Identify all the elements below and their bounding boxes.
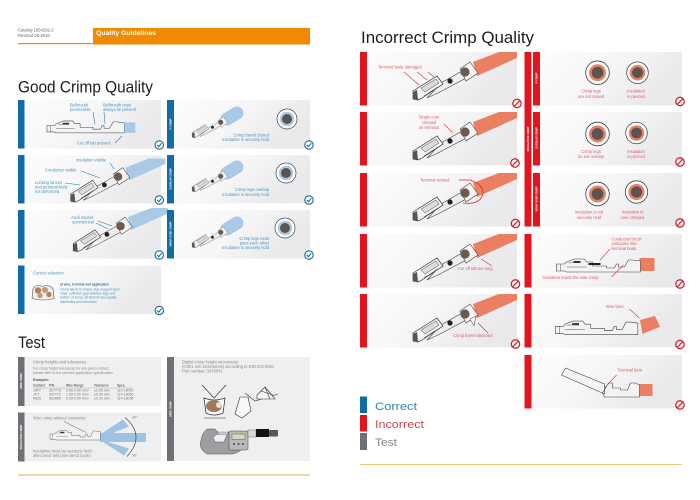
icon: prohibited <box>511 340 520 348</box>
panel: F-crimp incorrect: Crimp legs <box>581 88 601 94</box>
legend: Test <box>375 437 397 449</box>
heading: good crimp quality: Good Crimp Quality <box>18 78 153 96</box>
panel: conductor brush and insulation: Conductor brush <box>612 236 642 242</box>
panel: wrap over crimp incorrect: Insulation is not <box>575 210 604 214</box>
tolerance table: ±0.05 mm <box>94 388 110 392</box>
revision date: Revised 06-2016 <box>18 33 50 38</box>
panel: wrap over crimp good: Insulation is securely hold <box>222 245 270 250</box>
tolerance table: Spec. <box>117 384 126 388</box>
tolerance table: 0.50-1.00 mm² <box>66 388 90 392</box>
tolerance table: Wire Range <box>66 384 84 388</box>
panel: bellmouth: Cut off tab present <box>77 140 111 146</box>
icon: prohibited <box>676 401 684 409</box>
panel: wrap over crimp incorrect: over crimped <box>621 215 645 220</box>
legend: Correct <box>375 401 417 413</box>
tolerance table <box>33 378 134 400</box>
panel: correct selection: distributed and deformed <box>60 300 97 304</box>
bar: insulation crimp spanning bracket: INSULATION CRIMP <box>526 126 530 151</box>
panel: wire bent: Wire bent <box>606 304 624 309</box>
tolerance table: JPT <box>33 392 40 396</box>
panel: correct selection: Crimp barrel is closed, legs support each <box>60 287 120 291</box>
bend test diagram: 30° <box>132 454 138 458</box>
panel: digital crimp height micrometer: Part number: 3470091 <box>182 369 223 374</box>
panel: anvil imprint: symmetrical <box>72 220 94 224</box>
panel: F-crimp incorrect <box>533 52 682 106</box>
icon: prohibited <box>513 99 521 108</box>
panel: F-crimp incorrect: is pierced <box>627 94 645 99</box>
panel: digital crimp height micrometer: Digital crimp height micrometer <box>182 360 239 364</box>
footer rule right <box>360 464 682 465</box>
tolerance table: 962885 <box>49 396 61 400</box>
bar: insulation crimp spanning bracket <box>524 52 533 226</box>
panel: conductor and insulation visible: Insulation visible <box>76 158 107 162</box>
icon: prohibited <box>511 159 519 167</box>
bend test diagram: 30° <box>132 416 138 420</box>
panel: bellmouth: Bellmouth <box>70 102 89 108</box>
icon: prohibited <box>676 97 684 106</box>
panel: cut off tab too long <box>360 234 517 288</box>
panel: overlap crimp good: Crimp legs overlap <box>235 187 270 192</box>
panel: digital crimp height micrometer: WIRE CRIMP <box>168 401 172 417</box>
panel: single core crimped: on terminal <box>419 125 439 130</box>
tolerance table: 114-18050 <box>117 392 134 396</box>
panel: crimp heights and tolerances <box>18 357 161 406</box>
panel: overlap crimp incorrect: Insulation <box>627 149 645 154</box>
panel: F-crimp incorrect: are not closed <box>578 94 605 99</box>
panel: bellmouth: permissible <box>70 107 91 112</box>
heading: test: Test <box>18 333 45 352</box>
panel: bend test: INSULATION CRIMP <box>19 424 23 449</box>
panel: terminal bent <box>524 355 682 408</box>
panel: crimp barrel distorted: Crimp barrel distorted <box>453 333 493 338</box>
panel: wrap over crimp good: pass each other <box>240 240 270 246</box>
header title: Quality Guidelines <box>96 30 156 37</box>
panel: bend test <box>18 412 161 462</box>
panel: bellmouth: always be present <box>103 107 137 112</box>
panel: conductor and insulation visible: not deformed <box>35 189 60 194</box>
tolerance table: 927773 <box>49 388 61 392</box>
icon: correct check <box>155 196 164 204</box>
tolerance table: 114-18050 <box>117 388 134 392</box>
panel: correct selection: other, sufficient gap between legs and <box>60 292 115 296</box>
panel: single core crimped <box>360 112 517 166</box>
legend: Incorrect <box>375 419 424 431</box>
tolerance table: ±0.05 mm <box>94 392 110 396</box>
panel: overlap crimp incorrect: OVERLAP CRIMP <box>534 127 538 149</box>
bend test diagram <box>50 416 146 458</box>
panel: bellmouth: Bellmouth must <box>103 102 132 108</box>
panel: crimp barrel distorted <box>360 294 517 348</box>
panel: crimp heights and tolerances: please refer to the relevant application specification <box>33 371 113 375</box>
icon: correct check <box>155 251 164 259</box>
panel: F-crimp good: F-CRIMP <box>168 118 172 129</box>
icon: prohibited <box>511 280 520 288</box>
panel: anvil imprint <box>18 208 168 258</box>
tolerance table: Examples: <box>33 378 49 382</box>
panel: conductor and insulation visible <box>18 155 165 204</box>
panel: correct selection <box>18 266 161 314</box>
panel: wrap over crimp incorrect: Insulation is <box>622 210 643 214</box>
icon: prohibited <box>676 280 684 288</box>
panel: conductor brush and insulation: Insulation inside the wire crimp <box>542 275 599 280</box>
panel: crimp heights and tolerances: For crimp height tolerances for any given contact <box>33 366 109 370</box>
panel: terminal twisted <box>360 173 517 226</box>
panel: conductor brush and insulation <box>524 234 682 288</box>
panel: overlap crimp good <box>167 155 310 204</box>
panel: bend test: Wire crimp without conductor <box>33 416 86 420</box>
icon: prohibited <box>676 158 684 166</box>
panel: F-crimp good: Insulation is securely hold <box>222 137 270 142</box>
panel: overlap crimp incorrect: is pierced <box>627 154 645 159</box>
panel: conductor and insulation visible: Conductor visible <box>45 168 77 172</box>
panel: bellmouth <box>18 100 161 148</box>
panel: F-crimp incorrect: Insulation <box>627 88 645 94</box>
panel: F-crimp good <box>167 100 310 148</box>
panel: cut off tab too long: Cut off tab too long <box>458 266 493 271</box>
tolerance table: MQS <box>33 396 42 400</box>
panel: wrap over crimp incorrect: WRAP OVER CRIMP <box>534 186 538 212</box>
panel: crimp heights and tolerances: WIRE CRIMP <box>19 373 23 389</box>
panel: terminal twisted: Terminal twisted <box>420 178 450 182</box>
panel: correct selection: of wire, terminal and application <box>60 282 109 286</box>
icon: wire bundle cross-section <box>32 285 54 300</box>
panel: conductor and insulation visible: and terminal body <box>35 184 68 190</box>
icon: correct check <box>155 306 164 315</box>
panel: overlap crimp good: Insulation is securely hold <box>222 192 270 197</box>
panel: single core crimped: crimped <box>422 120 437 125</box>
tolerance table: 1.00-2.50 mm² <box>66 392 90 396</box>
icon: prohibited <box>676 219 684 227</box>
panel: terminal body damaged: Terminal body damaged <box>378 64 422 70</box>
legend <box>360 396 424 450</box>
icon: correct check <box>155 141 164 149</box>
panel: anvil imprint: Anvil imprint <box>71 215 94 220</box>
footer rule left <box>18 474 310 476</box>
panel: digital crimp height micrometer: (0.001 mm increments) according to DIN ISO 9001 <box>182 364 275 369</box>
tolerance table: Contact <box>33 384 46 388</box>
panel: overlap crimp incorrect: Crimp legs <box>581 149 601 154</box>
header bar <box>18 28 310 44</box>
panel: wrap over crimp good <box>167 210 310 258</box>
panel: overlap crimp incorrect: do not overlap <box>578 154 605 159</box>
tolerance table: 0.20-0.50 mm² <box>66 396 90 400</box>
panel: terminal bent: Terminal bent <box>618 368 643 372</box>
icon: anvil over crimped strands <box>202 385 226 418</box>
panel: single core crimped: Single core <box>419 114 440 120</box>
panel: wrap over crimp good: WRAP OVER CRIMP <box>168 221 172 247</box>
panel: F-crimp good: Crimp barrel closed <box>234 132 270 138</box>
heading: incorrect crimp quality: Incorrect Crimp Quality <box>361 28 534 47</box>
tolerance table: Tolerance <box>94 384 109 388</box>
tolerance table: ±0.03 mm <box>94 396 110 400</box>
tolerance table: P/N <box>49 384 55 388</box>
catalog reference: Catalog 1654292-2 <box>18 28 54 32</box>
panel: bend test: after bend test (one bend cycle) <box>33 453 91 458</box>
panel: wrap over crimp good: Crimp legs must <box>239 236 270 241</box>
icon: digital micrometer <box>200 429 278 454</box>
icon: measuring geometry <box>235 387 278 418</box>
panel: overlap crimp incorrect <box>533 112 682 166</box>
icon: prohibited <box>676 340 684 349</box>
panel: conductor brush and insulation: terminal body <box>612 246 637 251</box>
icon: correct check <box>305 251 313 259</box>
panel: digital crimp height micrometer <box>167 357 310 461</box>
icon: prohibited <box>511 219 520 228</box>
panel: terminal body damaged <box>360 52 517 106</box>
panel: wrap over crimp incorrect <box>533 173 682 226</box>
panel: correct selection: bottom of crimp, all strands are equally <box>60 296 117 300</box>
icon: correct check <box>305 141 313 149</box>
icon: correct check <box>305 196 313 204</box>
panel: bend test: Insulation must be securely held <box>33 448 92 454</box>
panel: overlap crimp good: OVERLAP CRIMP <box>168 168 172 190</box>
panel: wire bent <box>524 294 682 348</box>
panel: conductor brush and insulation: protrudes into <box>612 241 637 246</box>
tolerance table: JJPT <box>33 388 42 392</box>
tolerance table: 114-18035 <box>117 396 134 400</box>
panel: wrap over crimp incorrect: securely held <box>577 215 602 220</box>
panel: correct selection: Correct selection <box>33 270 64 276</box>
tolerance table: 927770 <box>49 392 61 396</box>
panel: conductor and insulation visible: Locking lances <box>35 180 62 185</box>
panel: crimp heights and tolerances: Crimp heights and tolerances <box>33 360 86 364</box>
panel: F-crimp incorrect: F-CRIMP <box>534 72 538 83</box>
